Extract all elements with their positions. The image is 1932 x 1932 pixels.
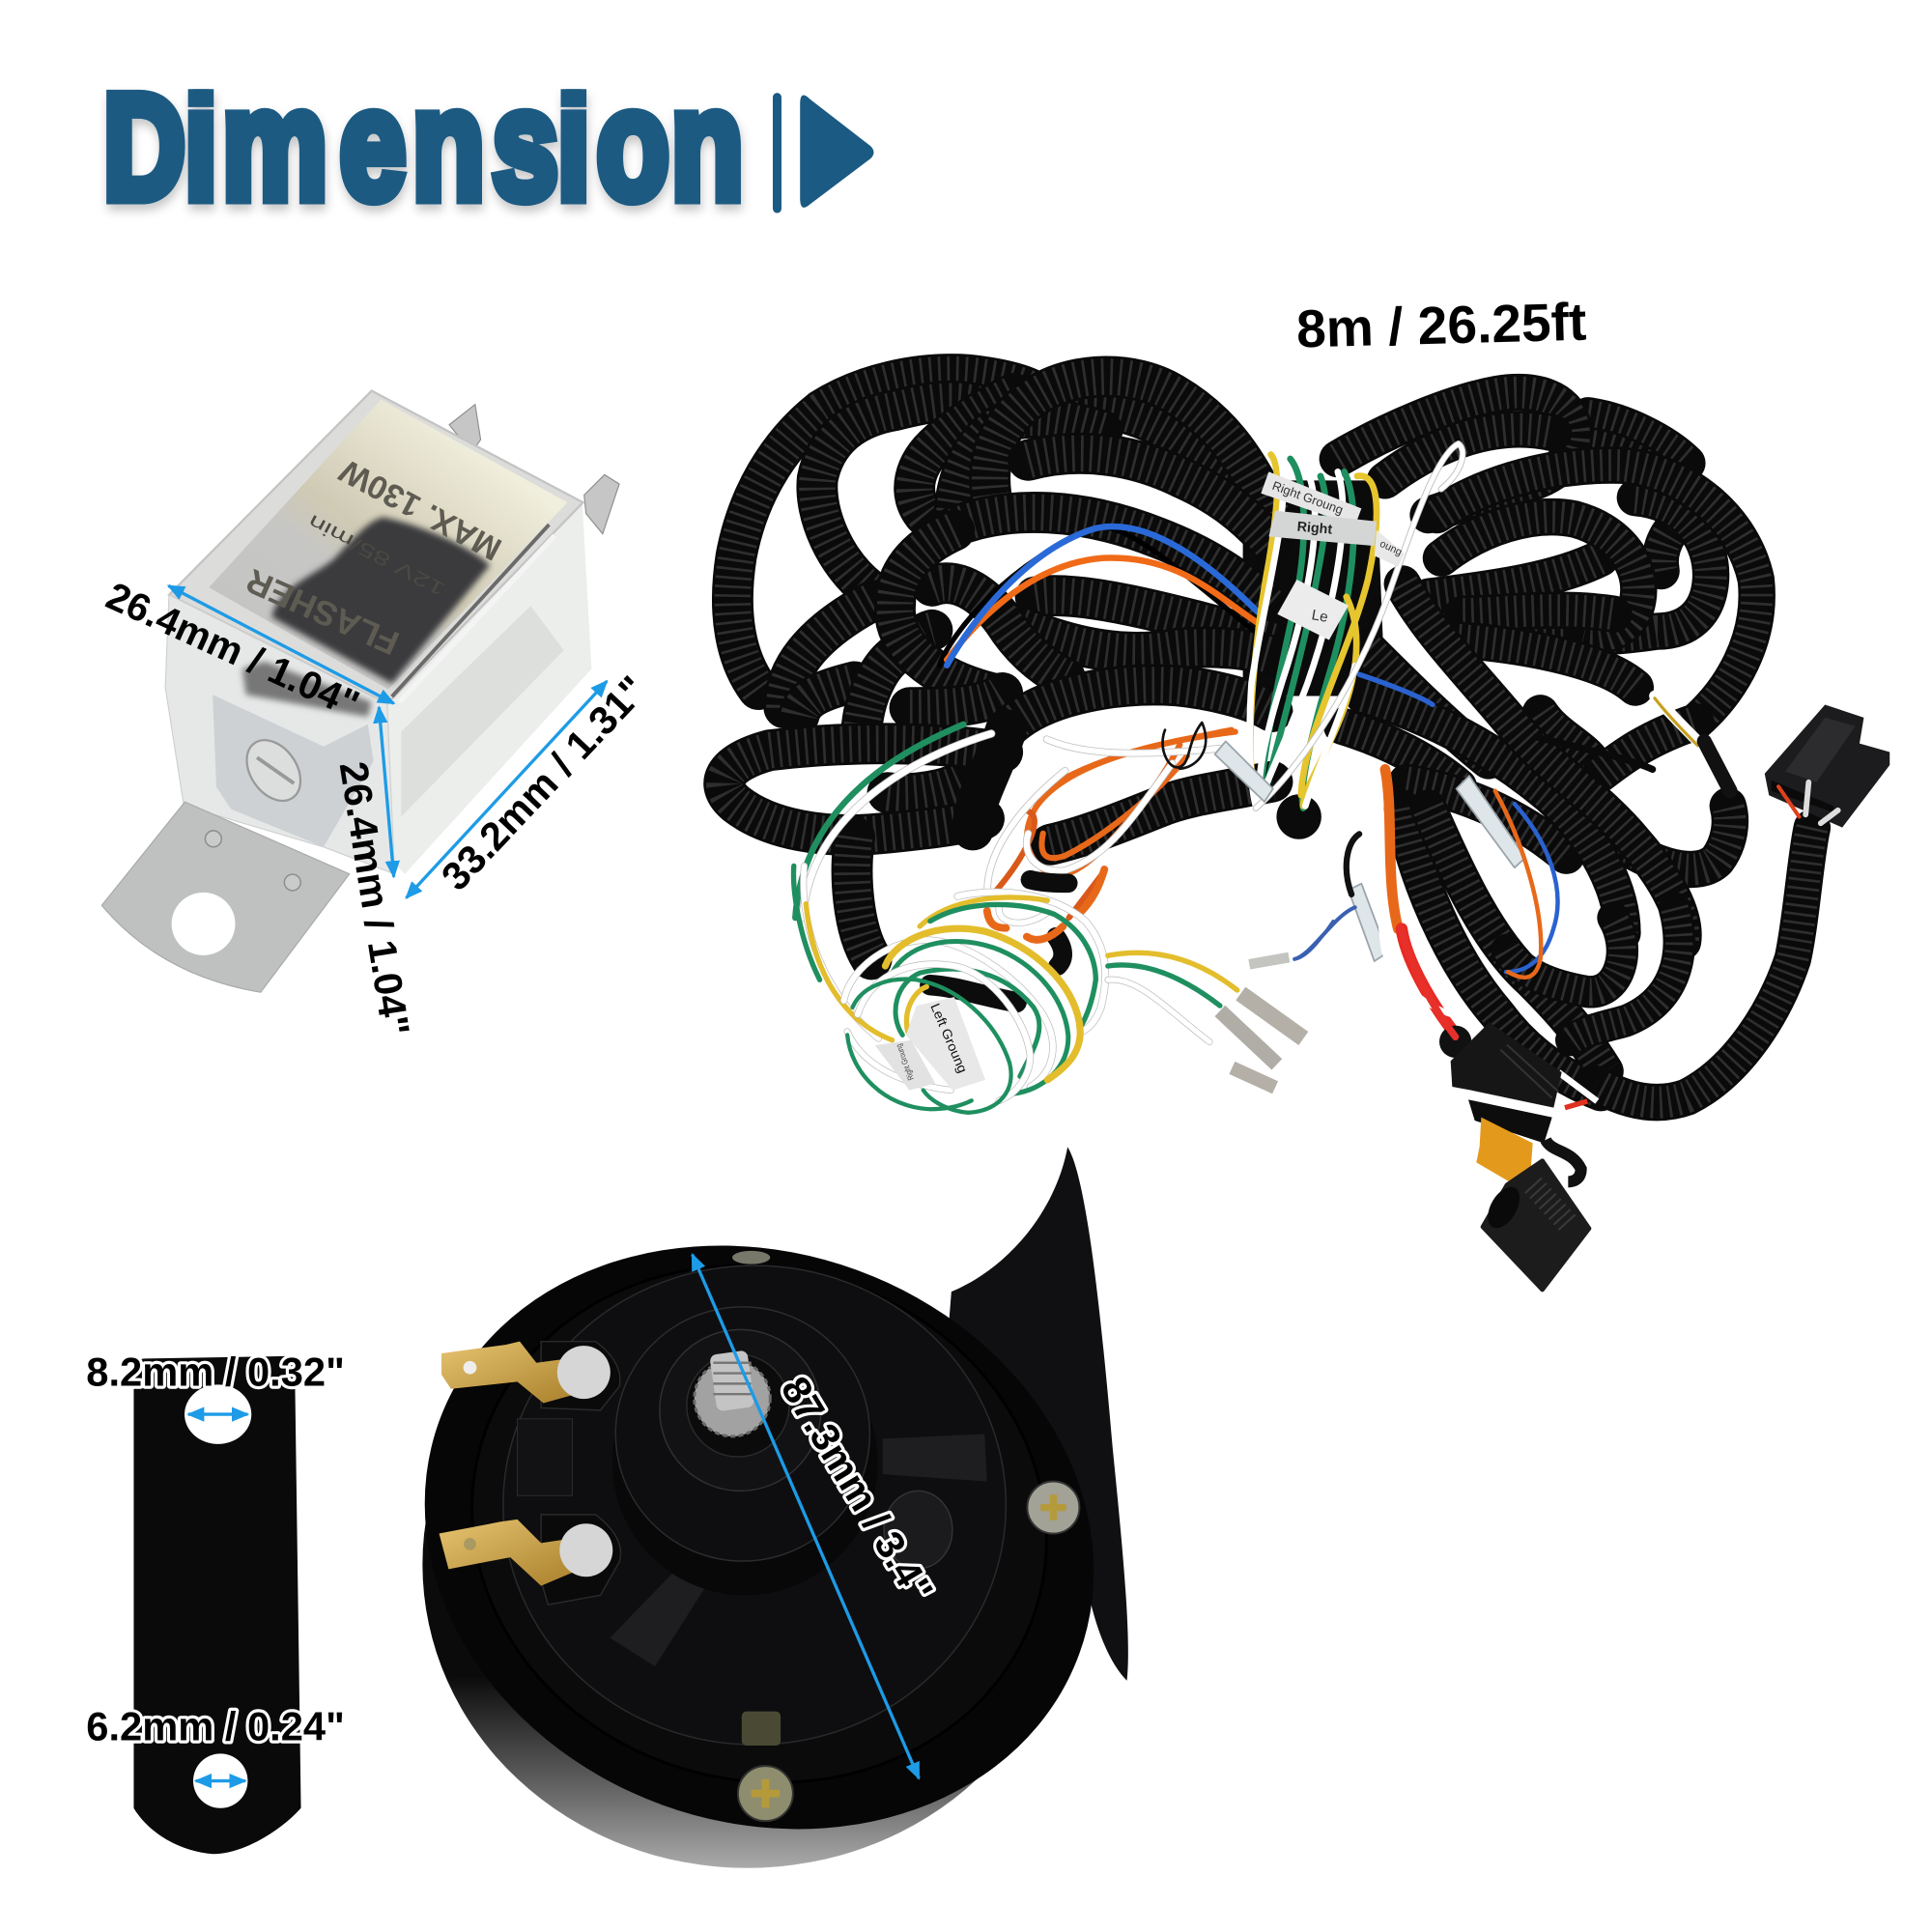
relay printed text: 12V 85/min <box>305 510 448 600</box>
coil labels: Left Groung <box>927 1001 970 1075</box>
green and white arc wires <box>795 724 991 918</box>
title: imension <box>185 58 744 232</box>
fuse holder <box>1381 927 1597 1290</box>
lower terminal <box>440 1515 621 1605</box>
connector block <box>518 1419 573 1495</box>
relay printed text <box>241 452 507 662</box>
dimension arrow: horn diameter <box>693 1255 919 1778</box>
dimension arrows: relay <box>168 585 607 897</box>
mounting bolt <box>695 1350 770 1436</box>
horn side wall <box>422 1261 1072 1868</box>
panel: mounting strap <box>133 1356 301 1854</box>
cables: left half <box>724 375 1272 959</box>
label: upper hole: 8.2mm / 0.32" <box>86 1350 345 1395</box>
spade terminals <box>1215 741 1525 961</box>
connector plug <box>1765 704 1889 828</box>
cables: right half <box>1243 392 1812 1102</box>
wire label tags: oung <box>1378 538 1404 558</box>
label: harness length: 8m / 26.25ft <box>1295 292 1587 359</box>
screw bottom <box>738 1766 793 1821</box>
horn boss <box>612 1329 878 1595</box>
coiled wires <box>794 866 1333 1113</box>
orange and white loom <box>987 723 1236 918</box>
relay top face <box>169 391 583 704</box>
relay right face <box>386 502 591 874</box>
taped wire bundle with labels <box>1215 443 1889 1056</box>
relay printed text: FLASHER <box>241 561 405 662</box>
label: relay length: 33.2mm / 1.31" <box>433 668 655 898</box>
top stud <box>732 1251 770 1264</box>
relay printed text: MAX. 130W <box>334 452 507 567</box>
screw right <box>1027 1482 1079 1534</box>
wire label tags: Le <box>1310 607 1329 626</box>
panel: wire harness <box>724 375 1889 1290</box>
blue and orange wires <box>795 526 1258 918</box>
horn vent <box>884 1491 952 1569</box>
assorted wires <box>1294 696 1730 1056</box>
coil labels <box>875 997 985 1091</box>
title <box>102 89 748 216</box>
wire label tags: Right Groung <box>1270 478 1345 517</box>
label: lower hole: 6.2mm / 0.24" <box>86 1703 345 1748</box>
title: D <box>103 64 185 230</box>
wire label tags <box>1261 471 1405 639</box>
panel: flasher relay <box>101 391 619 992</box>
dimension arrows: strap holes <box>188 1414 247 1781</box>
horn ribs <box>610 1434 987 1666</box>
panel: horn <box>342 1147 1177 1921</box>
mounting tab <box>101 802 350 992</box>
lower stud <box>742 1712 781 1746</box>
upper terminal <box>441 1342 620 1410</box>
icon: play arrow <box>773 93 873 213</box>
horn face <box>342 1153 1177 1921</box>
label: relay height: 26.4mm / 1.04" <box>331 758 418 1038</box>
label: horn diameter: 87.3mm / 3.4" <box>773 1369 942 1610</box>
relay front face <box>165 595 394 874</box>
wire label tags: Right <box>1296 520 1333 538</box>
label: relay width: 26.4mm / 1.04" <box>99 573 366 726</box>
coil labels: Right Groung <box>894 1042 916 1082</box>
spade terminals on coil leads <box>1220 957 1303 1088</box>
cables: lower loops <box>1507 908 1679 1040</box>
